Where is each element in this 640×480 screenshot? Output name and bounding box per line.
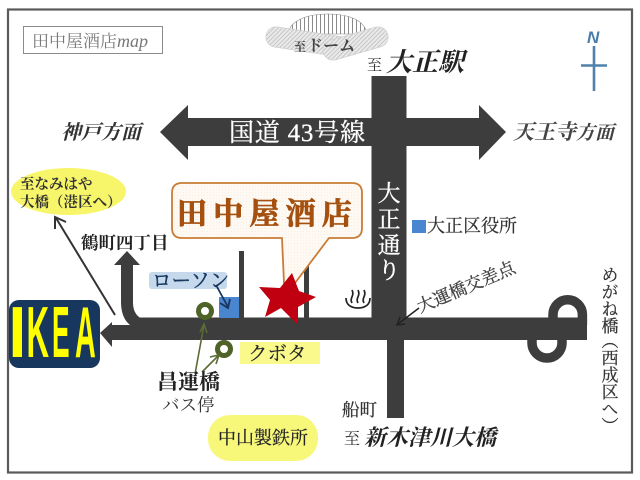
label: to Namihaya bridge: 至なみはや <box>20 176 92 193</box>
road label: Taisho-dori: 正 <box>378 207 400 232</box>
label: to Shinkizugawa bridge: 新木津川大橋 <box>364 425 499 450</box>
icon: bus stop south <box>218 342 230 356</box>
label: Kubota <box>240 342 320 365</box>
road: national route 43 double arrow <box>160 105 506 160</box>
label: Nakayama Steel: 中山製鉄所 <box>218 427 308 448</box>
side streets <box>239 251 309 318</box>
star: shop location <box>259 273 316 325</box>
road: Taisho-dori vertical <box>372 76 406 340</box>
logo: IKEA: K <box>26 291 49 373</box>
label: Megane bridge: めがね橋 <box>598 266 618 334</box>
dome landmark: 至ドーム <box>294 38 355 55</box>
label: Megane bridge <box>598 266 618 434</box>
direction: Tennoji: 天王寺方面 <box>513 120 617 144</box>
direction: Kobe: 神戸方面 <box>61 121 145 144</box>
road label: Taisho-dori: り <box>378 258 400 283</box>
north compass <box>581 28 607 91</box>
label: Daiunbashi intersection: 大運橋交差点 <box>414 257 519 317</box>
callout: Tanakaya Sake Shop: 田中屋酒店 <box>177 198 358 231</box>
title box: 田中屋酒店map <box>32 31 148 51</box>
road: meganebashi loops <box>532 300 582 358</box>
road label: route 43: 国道 43号線 <box>229 119 365 147</box>
road label: Taisho-dori: 通 <box>378 233 400 258</box>
label: Shoun bridge bus stop: バス停 <box>162 395 215 415</box>
arrow: toward Namihaya bridge <box>55 217 115 315</box>
label: to Shinkizugawa bridge: 至 <box>344 430 360 448</box>
dome landmark <box>276 14 378 55</box>
label: Shoun bridge bus stop <box>157 370 220 415</box>
icon: hot spring <box>346 290 370 308</box>
label: to Namihaya bridge <box>11 168 126 215</box>
label: Megane bridge: （西成区へ） <box>598 332 618 434</box>
label: Funamachi: 船町 <box>342 400 377 420</box>
callout: Tanakaya Sake Shop <box>172 183 362 283</box>
logo: IKEA: E <box>52 291 70 373</box>
label: to Taisho station: 至 <box>367 57 382 74</box>
arrow: Lawson to building <box>216 285 230 308</box>
road label: Taisho-dori: 大 <box>378 181 400 206</box>
label: Lawson: ローソン <box>152 271 229 292</box>
arrow: Daiunbashi intersection <box>397 308 419 325</box>
road: south branch <box>387 330 404 418</box>
label: to Namihaya bridge: 大橋（港区へ） <box>20 193 122 211</box>
label: Nakayama Steel <box>208 415 318 461</box>
road: main east-west road with west arrow <box>100 318 587 347</box>
title box <box>24 26 162 54</box>
arrows: bus stop pointers <box>195 324 219 374</box>
logo: IKEA: I <box>8 291 26 373</box>
icon: Lawson building <box>219 297 239 318</box>
label: Kubota: クボタ <box>248 343 307 365</box>
north compass: N <box>587 28 600 47</box>
logo: IKEA: A <box>75 291 96 373</box>
label: to Taisho station: 大正駅 <box>386 48 468 77</box>
logo: IKEA <box>8 291 100 373</box>
label: Tsurumachi 4-chome: 鶴町四丁目 <box>81 233 168 253</box>
label: Taisho ward office: 大正区役所 <box>427 216 517 236</box>
icon: bus stop north <box>198 304 212 318</box>
label: Shoun bridge bus stop: 昌運橋 <box>157 370 220 394</box>
road: north turn arrow <box>114 251 142 326</box>
